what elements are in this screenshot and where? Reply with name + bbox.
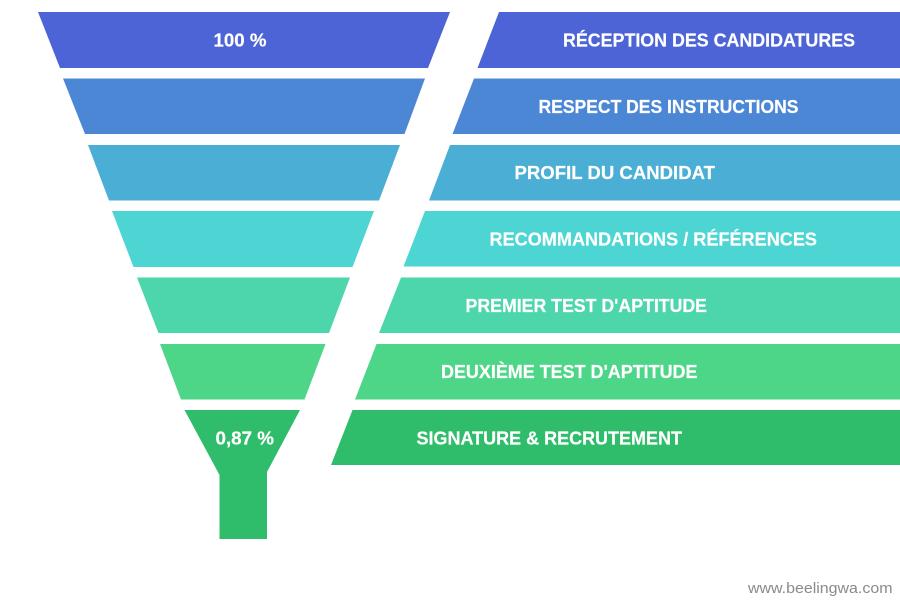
- funnel tier 1 with 100 % label: 100 %: [214, 30, 266, 50]
- stage 3 band: PROFIL DU CANDIDAT: [514, 163, 715, 183]
- stage 3 band: [429, 145, 900, 200]
- funnel tier 3: [88, 145, 400, 200]
- stage 6 band: [355, 344, 900, 400]
- stage 2 band: RESPECT DES INSTRUCTIONS: [538, 97, 798, 117]
- funnel: left tiers: [38, 12, 450, 539]
- stage 4 band: [404, 211, 900, 266]
- stage 1 band: [478, 12, 900, 68]
- funnel spout with 0,87 % label: [184, 410, 300, 539]
- stage 7 band: SIGNATURE & RECRUTEMENT: [416, 428, 682, 448]
- stage 5 band: PREMIER TEST D'APTITUDE: [466, 296, 707, 316]
- funnel spout with 0,87 % label: 0,87 %: [216, 428, 274, 448]
- funnel tier 6: [160, 344, 326, 400]
- stage 7 band: [331, 410, 900, 465]
- stage 6 band: DEUXIÈME TEST D'APTITUDE: [441, 361, 698, 382]
- funnel tier 2: [63, 78, 425, 134]
- funnel tier 1 with 100 % label: [38, 12, 450, 68]
- funnel tier 4: [112, 211, 374, 267]
- funnel tier 5: [137, 278, 350, 333]
- stage 5 band: [379, 278, 900, 333]
- stage 1 band: RÉCEPTION DES CANDIDATURES: [563, 30, 855, 50]
- website credit: www.beelingwa.com: [747, 580, 892, 597]
- stage 2 band: [452, 78, 900, 134]
- stage bands: right column: [331, 12, 900, 465]
- stage 4 band: RECOMMANDATIONS / RÉFÉRENCES: [490, 228, 817, 250]
